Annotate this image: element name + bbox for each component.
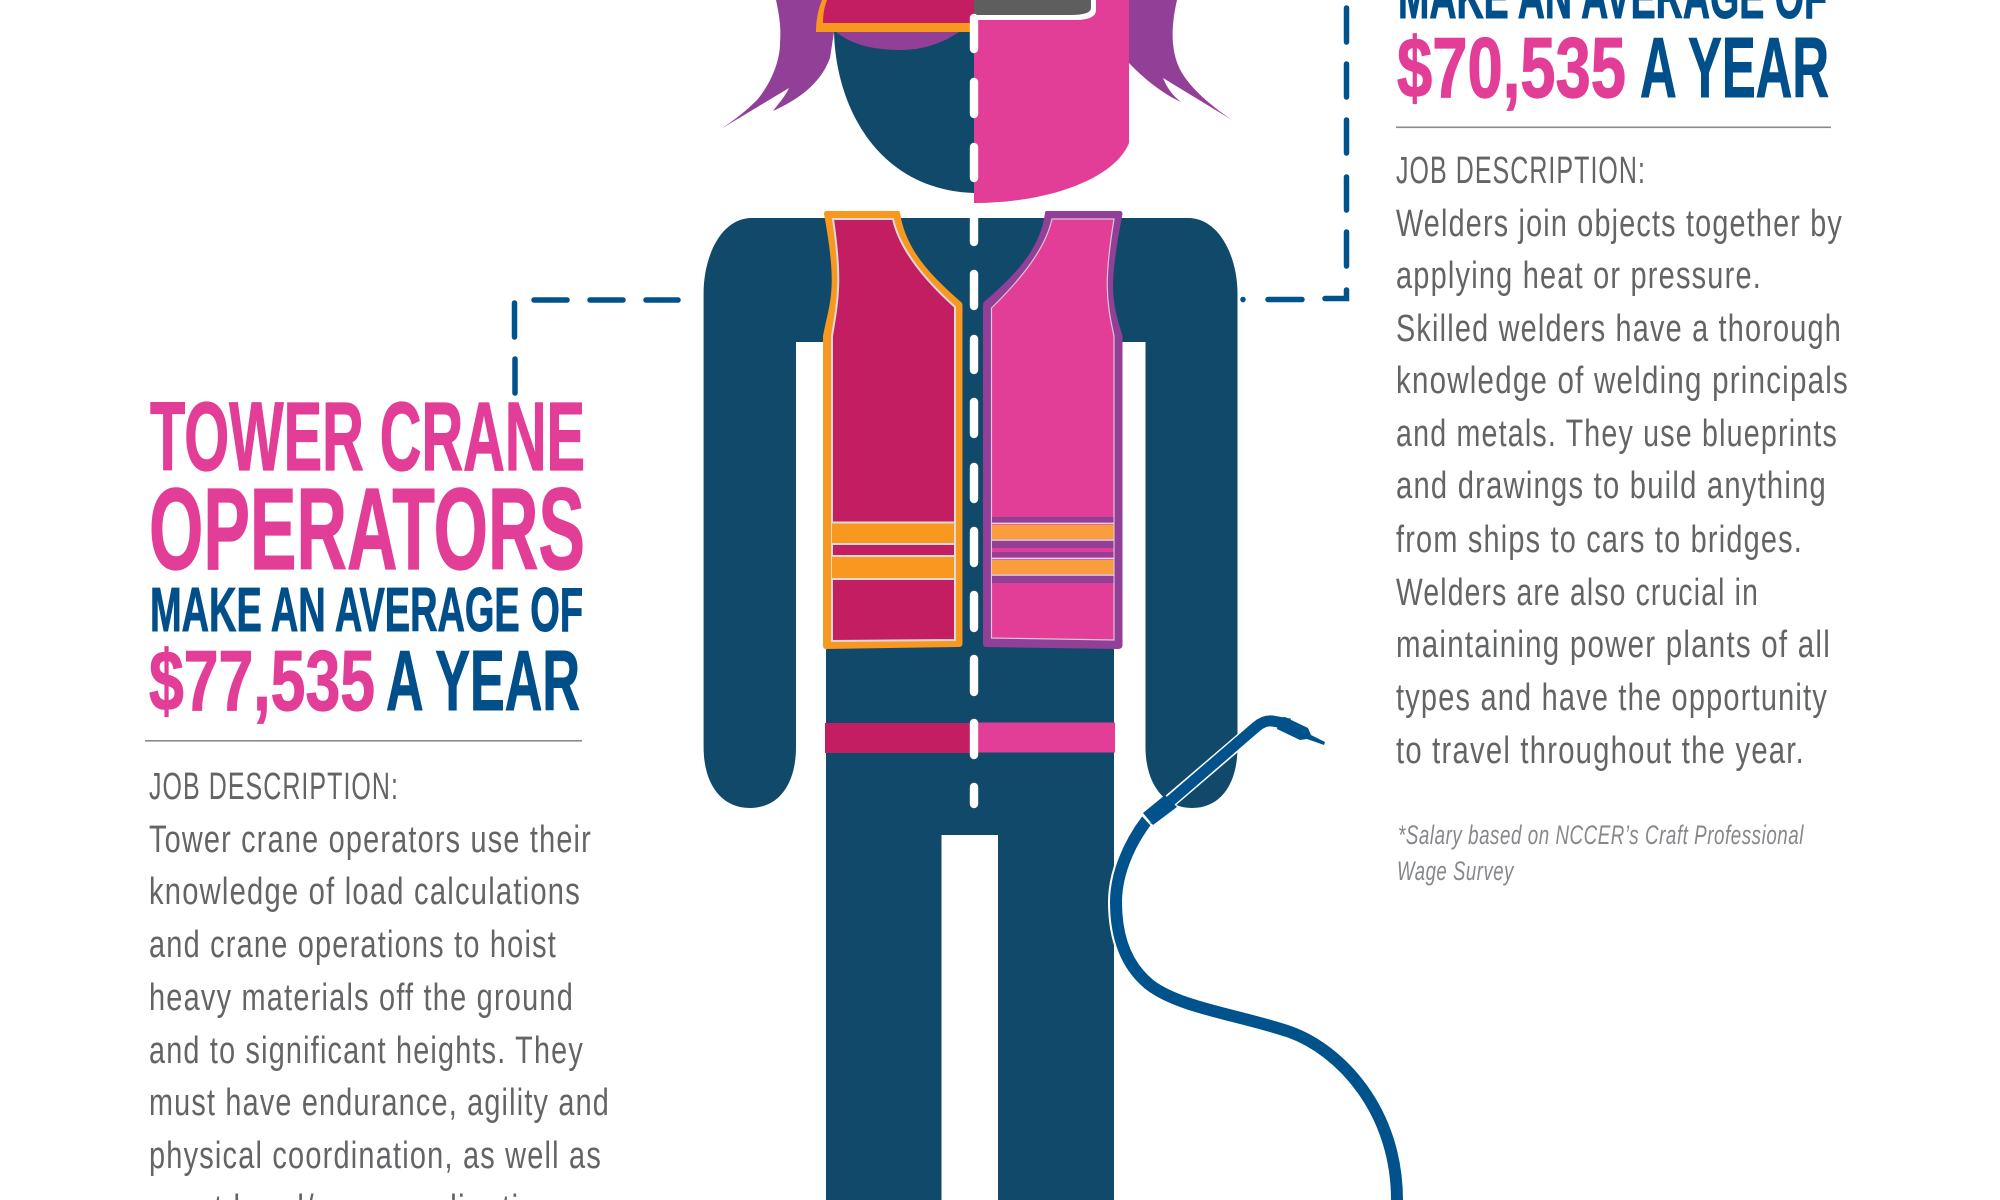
salary statement: $77,535 (149, 634, 375, 729)
footnote: *Salary based on NCCER’s Craft Professional (1398, 820, 1804, 850)
hard hat (816, 0, 974, 32)
job description text: types and have the opportunity (1396, 677, 1828, 719)
footnote: Wage Survey (1397, 856, 1514, 886)
job description text: to travel throughout the year. (1396, 730, 1805, 772)
job description text: JOB DESCRIPTION: (149, 766, 399, 808)
job description text: heavy materials off the ground (149, 977, 574, 1019)
head: welding mask half (974, 0, 1129, 203)
head: dark half (834, 0, 974, 193)
salary statement: $70,535 (1397, 21, 1626, 116)
torch tube (1168, 721, 1290, 803)
job description text: and metals. They use blueprints (1396, 413, 1838, 455)
panel: tower crane operators (145, 382, 610, 1200)
belt (825, 722, 1115, 753)
heading: job title: TOWER CRANE (150, 382, 585, 491)
salary statement (149, 576, 583, 729)
panel: welders (1396, 0, 1849, 886)
torch handle (1142, 795, 1177, 826)
job description text: applying heat or pressure. (1396, 255, 1762, 297)
job description text: Skilled welders have a thorough (1396, 308, 1842, 350)
torch nozzle (1277, 717, 1325, 745)
job description text: from ships to cars to bridges. (1396, 519, 1803, 561)
salary statement: A YEAR (1640, 21, 1829, 116)
job description text: Welders join objects together by (1396, 203, 1843, 245)
job description text: physical coordination, as well as (149, 1135, 602, 1177)
head: purple hairline under cap (834, 30, 962, 50)
salary statement: MAKE AN AVERAGE OF (150, 576, 583, 645)
job description text (1396, 150, 1849, 772)
dashed connector: left (514, 300, 678, 393)
mask visor (974, 0, 1096, 20)
worker figure (704, 0, 1238, 1200)
footnote (1397, 820, 1804, 886)
job description text: Tower crane operators use their (149, 819, 592, 861)
hose (1116, 820, 1397, 1200)
salary statement (1397, 0, 1829, 116)
heading: job title: OPERATORS (149, 464, 585, 594)
job description text: and crane operations to hoist (149, 924, 557, 966)
icon: welding torch and hose (1116, 717, 1397, 1200)
center dashed divider (970, 18, 978, 804)
safety vest: left half (823, 211, 962, 649)
job description text: Welders are also crucial in (1396, 572, 1759, 614)
job description text: and drawings to build anything (1396, 465, 1827, 507)
job description text: and to significant heights. They (149, 1030, 584, 1072)
body silhouette (704, 218, 1238, 1200)
job description text: must have endurance, agility and (149, 1082, 610, 1124)
job description text: knowledge of load calculations (149, 871, 581, 913)
job description text: knowledge of welding principals (1396, 360, 1849, 402)
job description text (149, 766, 610, 1200)
safety vest: right half (983, 211, 1122, 649)
job description text: maintaining power plants of all (1396, 624, 1831, 666)
heading: job title (149, 382, 585, 594)
dashed connector: right (1243, 8, 1346, 300)
job description text: JOB DESCRIPTION: (1396, 150, 1646, 192)
salary statement: A YEAR (386, 634, 580, 729)
hair (721, 0, 1232, 129)
